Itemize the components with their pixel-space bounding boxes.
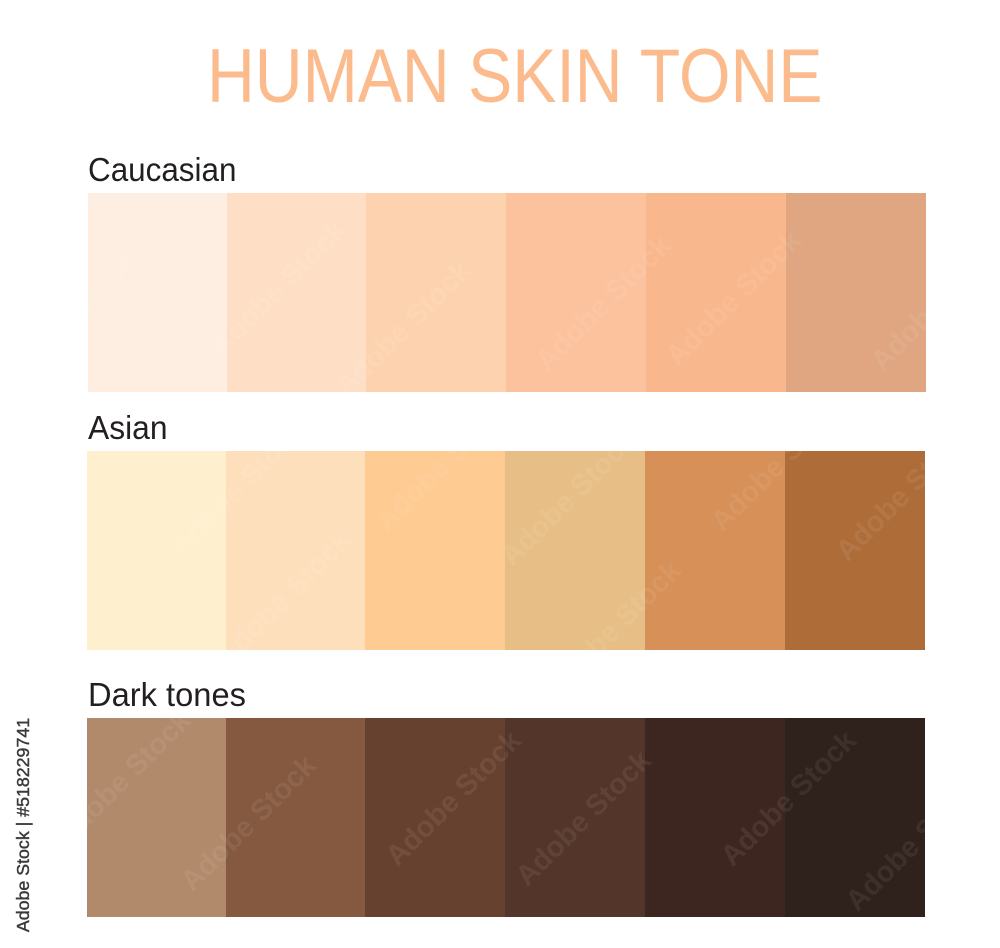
watermark overlay: Adobe Stock — [380, 724, 528, 873]
watermark overlay: Adobe Stock — [210, 524, 358, 673]
watermark overlay: Adobe Stock — [165, 414, 313, 563]
watermark overlay: Adobe Stock — [705, 389, 853, 538]
watermark overlay: Adobe Stock — [370, 389, 518, 538]
watermark overlay: Adobe Stock — [175, 749, 323, 898]
watermark overlay: Adobe Stock — [540, 554, 688, 703]
watermark overlay: Adobe Stock — [840, 769, 988, 918]
side credit text: Adobe Stock | #518229741 — [13, 717, 33, 932]
heading: Asian: Asian — [88, 409, 168, 446]
watermark overlay: Adobe Stock — [330, 254, 478, 403]
watermark overlay: Adobe Stock — [830, 419, 978, 568]
watermark overlay: Adobe Stock — [660, 224, 808, 373]
watermark overlay: Adobe Stock — [205, 214, 353, 363]
watermark overlay: Adobe Stock — [495, 424, 643, 573]
watermark overlay: Adobe Stock — [50, 704, 198, 853]
watermark overlay: Adobe Stock — [530, 229, 678, 378]
heading: Dark tones: Dark tones — [88, 676, 246, 713]
swatch row: Caucasian — [88, 193, 926, 392]
watermark overlay: Adobe Stock — [510, 744, 658, 893]
swatch row: Dark tones — [87, 718, 925, 917]
swatch row: Asian — [87, 451, 925, 650]
title: HUMAN SKIN TONE — [207, 34, 822, 119]
watermark overlay: Adobe Stock — [715, 724, 863, 873]
heading: Caucasian: Caucasian — [88, 151, 236, 188]
